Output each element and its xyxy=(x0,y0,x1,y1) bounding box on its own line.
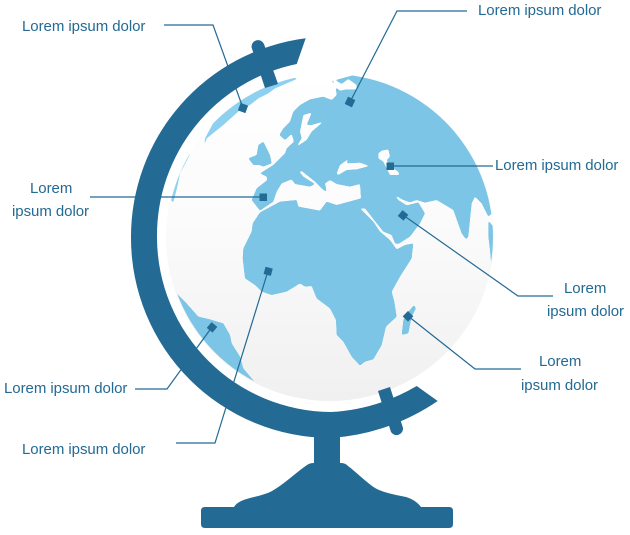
globe sphere xyxy=(166,73,494,401)
label: Madagascar: Lorem xyxy=(539,353,581,370)
label: left xyxy=(12,180,89,220)
continents on globe xyxy=(171,76,493,382)
label: right: Lorem ipsum dolor xyxy=(495,157,618,174)
label: left: ipsum dolor xyxy=(12,203,89,220)
land: North America sliver xyxy=(171,154,190,202)
location markers xyxy=(207,97,413,333)
label: left: Lorem xyxy=(30,180,72,197)
label: bottom: Lorem ipsum dolor xyxy=(22,441,145,458)
axis pin top xyxy=(252,40,278,88)
globe stand xyxy=(131,38,453,528)
label: top left: Lorem ipsum dolor xyxy=(22,18,145,35)
label: lower right: ipsum dolor xyxy=(547,303,624,320)
label: Madagascar xyxy=(521,353,598,394)
island: Britain xyxy=(248,142,272,167)
label: Madagascar: ipsum dolor xyxy=(521,377,598,394)
land: Southeast Asia sliver xyxy=(488,222,493,262)
label: lower right xyxy=(547,280,624,320)
land: Greenland xyxy=(204,78,296,144)
base xyxy=(201,463,453,528)
axis pin bottom xyxy=(378,387,403,435)
landmass: Eurasia and Africa xyxy=(243,73,507,366)
meridian ring xyxy=(131,38,438,438)
label: lower right: Lorem xyxy=(564,280,606,297)
label: top right: Lorem ipsum dolor xyxy=(478,2,601,19)
neck xyxy=(314,432,340,470)
land: South America xyxy=(177,294,254,382)
leader lines xyxy=(90,11,553,443)
island: Madagascar xyxy=(402,305,416,335)
label: lower left: Lorem ipsum dolor xyxy=(4,380,127,397)
